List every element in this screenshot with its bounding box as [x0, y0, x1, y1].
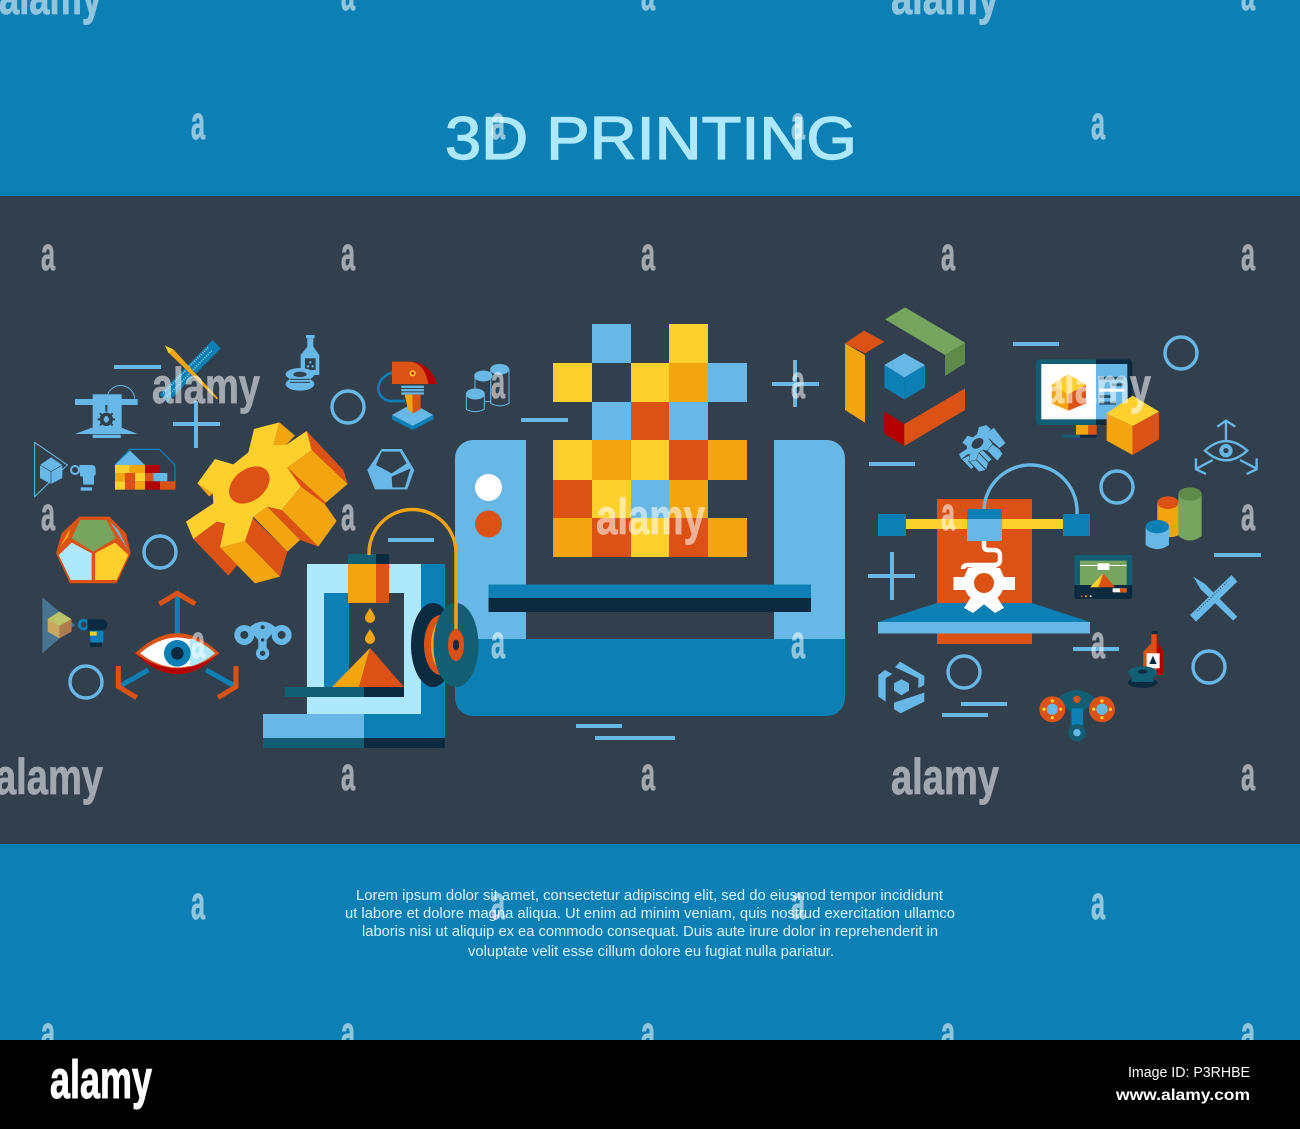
- outlined dodecahedron icon: [367, 449, 414, 489]
- stock photo watermarks: a: [1091, 96, 1105, 149]
- white gear with filament: [954, 541, 1015, 613]
- monitor with cube: [1036, 359, 1159, 455]
- light blue dial tool: [234, 622, 292, 660]
- stock photo watermarks: alamy: [1043, 358, 1151, 414]
- stock photo watermarks: a: [341, 487, 355, 540]
- crossed ruler and pencil icon: [1190, 575, 1237, 622]
- image id: Image ID: P3RHBE: [1128, 1064, 1250, 1081]
- printed pyramid: [332, 648, 404, 687]
- stock photo watermarks: alamy: [891, 749, 999, 805]
- stock photo watermarks: alamy: [596, 489, 705, 545]
- stock photo watermarks: a: [1091, 876, 1105, 929]
- watermark strip cut off by footer: a: [941, 1006, 955, 1059]
- stock photo watermarks: a: [491, 615, 505, 668]
- right 3D printer with gear: [878, 465, 1090, 644]
- prism with scanner icon: [35, 442, 96, 497]
- mini cylinders icon: [466, 364, 509, 412]
- molten drops: [365, 608, 375, 644]
- body paragraph: ut labore et dolore magna aliqua. Ut enim ad minim veniam, quis nostrud exercitation ullamco: [345, 906, 955, 922]
- stock photo watermarks: a: [491, 355, 505, 408]
- stock photo watermarks: a: [341, 227, 355, 280]
- stock photo watermarks: a: [791, 355, 805, 408]
- small outlined hexagon cube logo: [878, 662, 924, 713]
- watermark strip cut off by footer: a: [641, 1006, 655, 1059]
- body paragraph: voluptate velit esse cillum dolore eu fugiat nulla pariatur.: [468, 944, 834, 960]
- red extruder icon: [378, 362, 437, 430]
- printed pixel grid: [553, 324, 747, 557]
- watermark strip cut off by footer: a: [41, 1006, 55, 1059]
- watermark strip cut off by footer: a: [341, 1006, 355, 1059]
- bottle and spool icon: [286, 335, 319, 391]
- central printer: [455, 440, 845, 716]
- stock photo watermarks: a: [491, 876, 505, 929]
- small blue gear icon: [959, 425, 1006, 472]
- website: www.alamy.com: [1115, 1087, 1250, 1104]
- orange dial tool: [1039, 690, 1115, 741]
- eye with three axes: [118, 593, 236, 698]
- dark main panel: [0, 196, 1300, 844]
- body paragraph: Lorem ipsum dolor sit amet, consectetur adipiscing elit, sed do eiusmod tempor incididunt: [356, 888, 943, 904]
- hexagon cube logo: [845, 307, 965, 446]
- footer bar: [0, 1040, 1300, 1129]
- pixel house icon: [115, 449, 175, 490]
- stock photo watermarks: a: [191, 876, 205, 929]
- footer logo: alamy: [50, 1050, 152, 1110]
- stock photo watermarks: a: [1241, 487, 1255, 540]
- extruder printer with pyramid: [263, 554, 445, 748]
- watermark strip cut off by footer: [41, 1006, 1255, 1059]
- stock photo watermarks: a: [1241, 227, 1255, 280]
- stock photo watermarks: a: [1241, 747, 1255, 800]
- stock photo watermarks: a: [641, 227, 655, 280]
- stock photo watermarks: a: [791, 615, 805, 668]
- outlined eye with axes icon: [1196, 421, 1257, 474]
- body paragraph: laboris nisi ut aliquip ex ea commodo consequat. Duis aute irure dolor in reprehenderit in: [362, 924, 938, 940]
- tablet with pyramid icon: [1074, 555, 1132, 599]
- body paragraph: [345, 888, 955, 960]
- filament spool: [369, 510, 478, 687]
- ruler and pencil icon: [159, 340, 221, 403]
- stock photo watermarks: [0, 0, 1255, 929]
- stock photo watermarks: a: [941, 227, 955, 280]
- stock photo watermarks: a: [641, 747, 655, 800]
- stock photo watermarks: alamy: [152, 358, 260, 414]
- colored cylinders icon: [1146, 487, 1202, 549]
- stock photo watermarks: a: [791, 876, 805, 929]
- small gold cube prism with scanner: [42, 597, 107, 653]
- top header band: [0, 0, 1300, 196]
- decorative accents: rings, plus signs and lines: [70, 337, 1261, 740]
- stock photo watermarks: a: [41, 227, 55, 280]
- title: 3D PRINTING: [445, 105, 857, 172]
- stock photo watermarks: a: [41, 487, 55, 540]
- stock photo watermarks: a: [941, 487, 955, 540]
- stock photo watermarks: a: [191, 615, 205, 668]
- mini printer icon: [75, 386, 138, 438]
- colored dodecahedron: [56, 517, 131, 583]
- bottom text band: [0, 844, 1300, 1040]
- printer paper slot: [488, 584, 811, 612]
- printer buttons: [475, 474, 502, 538]
- stock photo watermarks: a: [191, 96, 205, 149]
- red bottle and spool icon: [1128, 631, 1164, 688]
- stock photo watermarks: a: [791, 96, 805, 149]
- extruder head: [348, 554, 389, 603]
- stock photo watermarks: a: [341, 747, 355, 800]
- stock photo watermarks: a: [491, 96, 505, 149]
- large gear: [186, 422, 348, 583]
- stock photo watermarks: a: [1091, 615, 1105, 668]
